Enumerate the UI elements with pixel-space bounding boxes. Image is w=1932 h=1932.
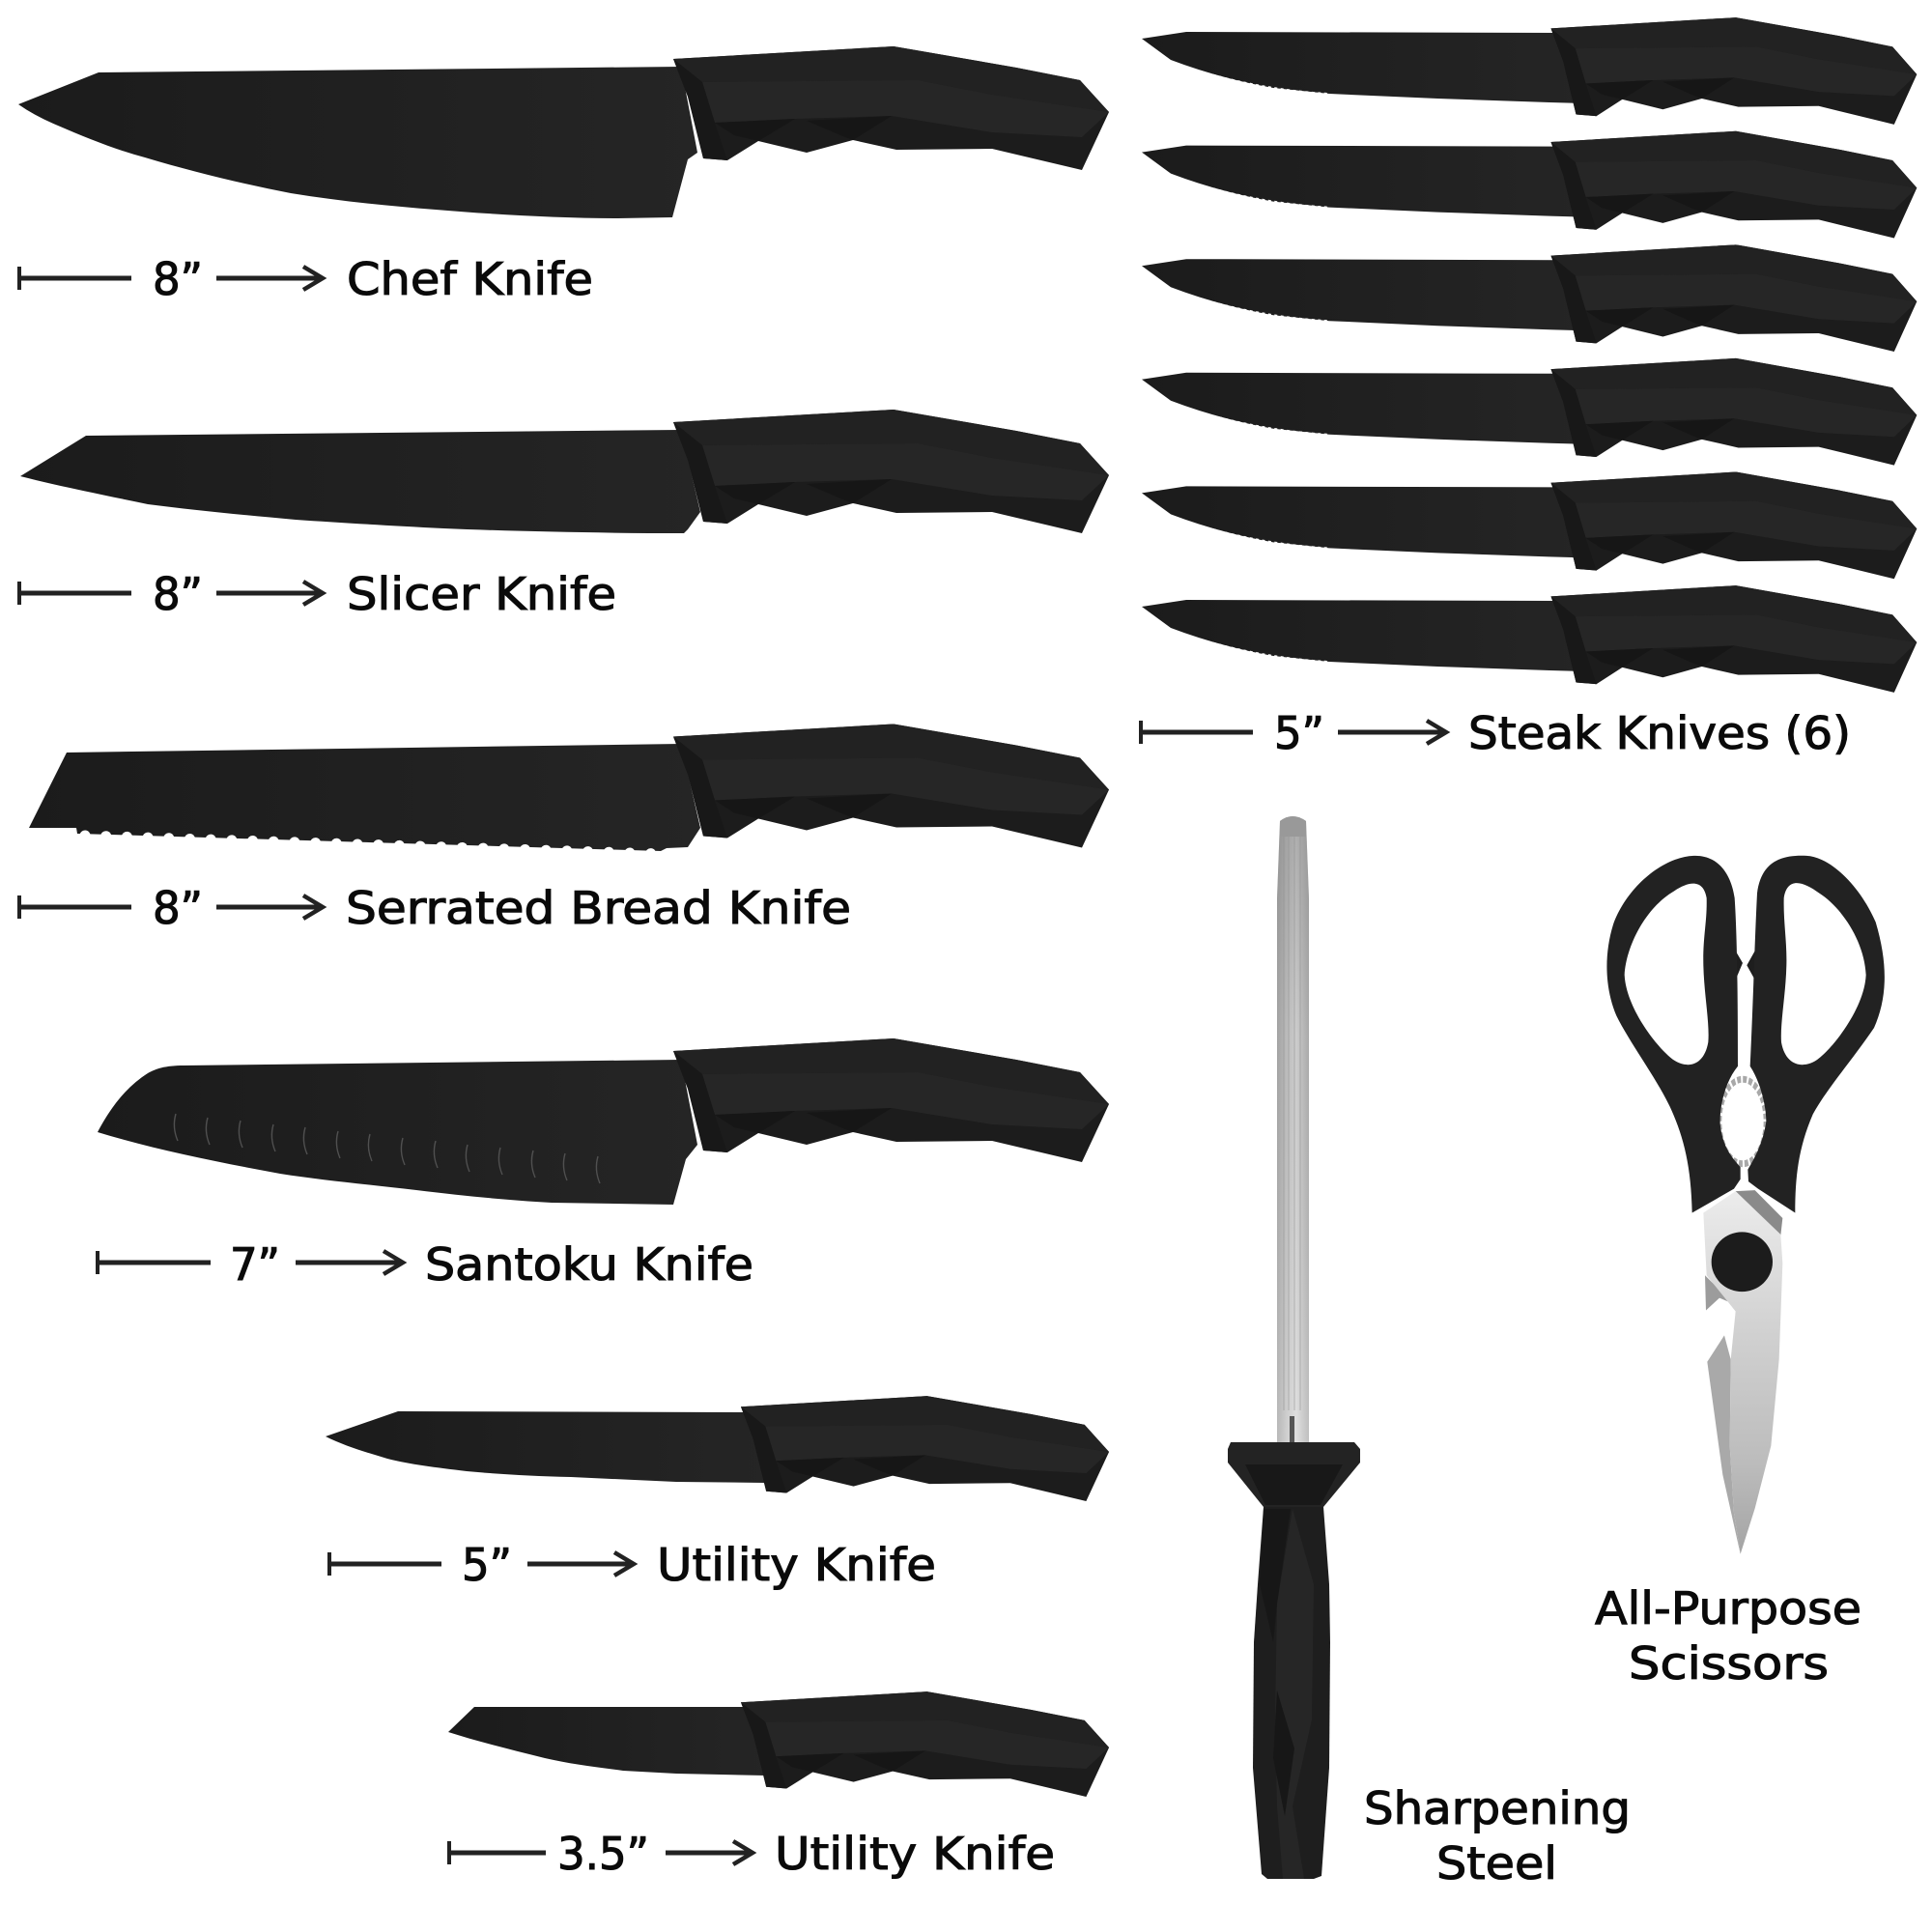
text: All-Purpose Scissors: Scissors <box>1629 1637 1829 1690</box>
text: Sharpening Steel: Steel <box>1436 1837 1557 1889</box>
dimension line <box>19 276 131 280</box>
text: Santoku Knife: Santoku Knife <box>425 1238 753 1291</box>
arrow <box>216 904 321 910</box>
label row: 3.5 inch utility knife: 3.5” <box>557 1828 649 1880</box>
opener ring <box>1719 1079 1766 1164</box>
steak knives (six) <box>1142 17 1917 693</box>
right handle <box>1747 856 1885 1213</box>
text: All-Purpose Scissors <box>1595 1582 1861 1690</box>
text: Steak Knives (6): Steak Knives (6) <box>1468 707 1851 759</box>
dimension line <box>329 1561 441 1567</box>
label row: 8 inch slicer knife: 8” <box>153 568 203 620</box>
text: Chef Knife: Chef Knife <box>347 253 593 305</box>
arrow <box>216 276 321 280</box>
text: Sharpening Steel <box>1364 1782 1631 1889</box>
sharpening steel <box>1228 816 1360 1879</box>
blade dimples <box>174 1114 600 1183</box>
knife: 5 inch utility knife <box>326 1396 1109 1501</box>
arrow <box>666 1851 751 1855</box>
label row: 8 inch chef knife: 8” <box>153 253 203 305</box>
scissors <box>1606 856 1885 1554</box>
label row: 8 inch slicer knife <box>19 568 616 620</box>
label row: 7 inch santoku knife: 7” <box>230 1238 280 1291</box>
dimension line <box>1141 730 1253 734</box>
text: Utility Knife: Utility Knife <box>657 1539 936 1591</box>
knife: slicer knife <box>20 410 1109 533</box>
dimension line <box>449 1851 546 1855</box>
arrow <box>527 1561 632 1567</box>
guard <box>1228 1442 1360 1507</box>
label row: 8 inch bread knife <box>19 882 851 934</box>
left handle <box>1606 856 1741 1213</box>
arrow <box>1338 730 1444 734</box>
label row: 8 inch chef knife <box>19 253 593 305</box>
dimension line <box>98 1260 211 1265</box>
upper blade <box>1703 1191 1782 1554</box>
arrow <box>296 1260 401 1265</box>
knife: serrated bread knife <box>29 724 1109 854</box>
text: Sharpening Steel: Sharpening <box>1364 1782 1631 1834</box>
label row: 5 inch steak knives <box>1141 707 1851 759</box>
pivot <box>1712 1232 1773 1292</box>
label row: 5 inch steak knives: 5” <box>1274 707 1324 759</box>
text: Serrated Bread Knife: Serrated Bread Knife <box>346 882 851 934</box>
knife: 3.5 inch utility knife <box>448 1691 1109 1797</box>
stop nubs <box>1736 951 1755 980</box>
grip <box>1253 1507 1330 1879</box>
knife: santoku knife <box>98 1038 1109 1205</box>
knife: chef knife <box>18 46 1109 218</box>
label row: 7 inch santoku knife <box>98 1238 753 1291</box>
text: Slicer Knife: Slicer Knife <box>347 568 616 620</box>
steel rod <box>1277 816 1309 1444</box>
lower blade <box>1736 1190 1782 1236</box>
arrow <box>216 591 321 595</box>
label row: 5 inch utility knife: 5” <box>462 1539 512 1591</box>
label row: 5 inch utility knife <box>329 1539 936 1591</box>
label row: 8 inch bread knife: 8” <box>153 882 203 934</box>
dimension line <box>19 591 131 595</box>
label row: 3.5 inch utility knife <box>449 1828 1055 1880</box>
text: All-Purpose Scissors: All-Purpose <box>1595 1582 1861 1634</box>
text: Utility Knife: Utility Knife <box>775 1828 1055 1880</box>
dimension line <box>19 904 131 910</box>
